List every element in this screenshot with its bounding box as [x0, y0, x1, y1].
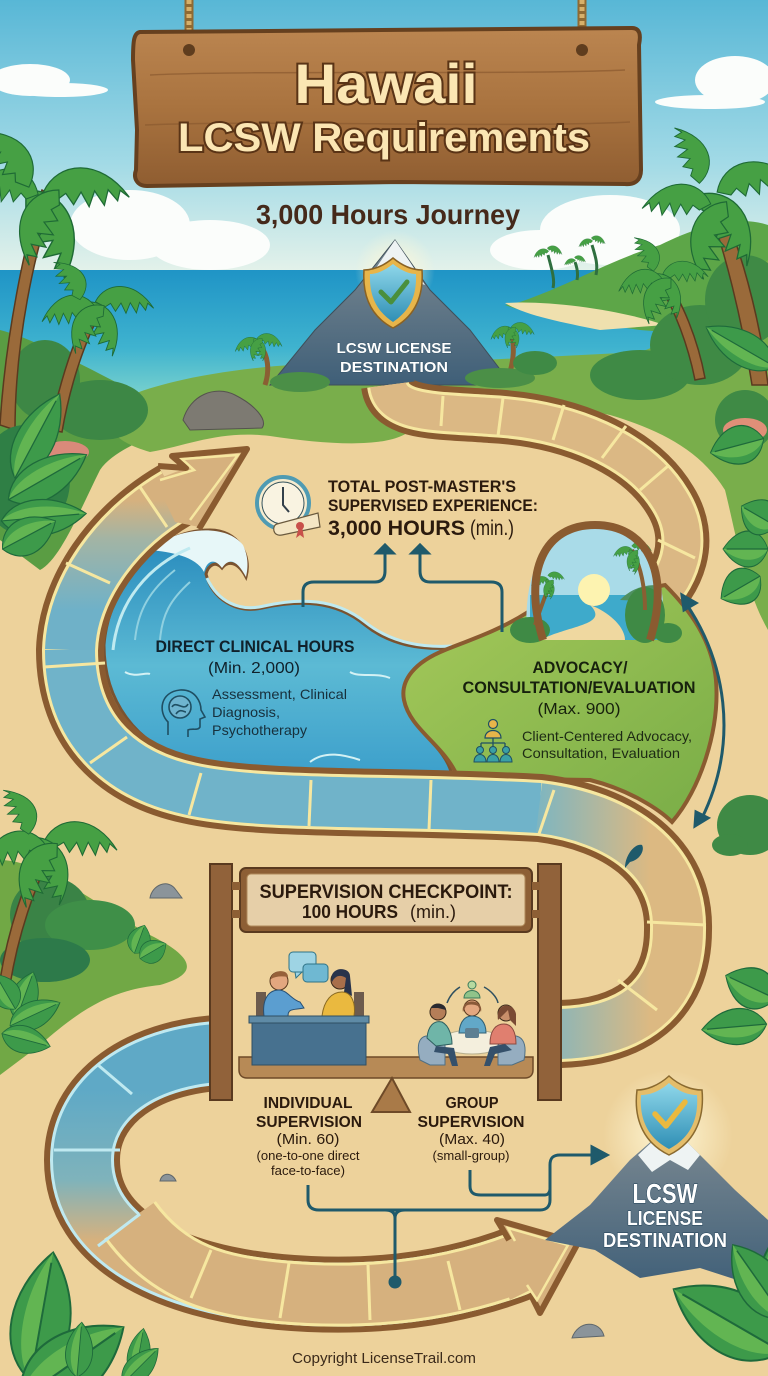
- plant: lower left island: [0, 968, 66, 1060]
- arrowhead: lower: [490, 1220, 578, 1313]
- connectors: supervision to destination: [308, 1147, 607, 1287]
- mountain label: lower: LCSW: [632, 1178, 698, 1209]
- sign title: SUPERVISION CHECKPOINT:: [260, 882, 512, 903]
- mountain label: top: DESTINATION: [340, 359, 448, 376]
- title: Hawaii: [294, 52, 478, 115]
- description: advocacy: Client-Centered Advocacy,: [522, 728, 692, 744]
- total experience text: 3,000 HOURS: [328, 517, 465, 540]
- description: direct clinical: Diagnosis,: [212, 704, 280, 720]
- clouds: [0, 56, 768, 270]
- sign: supervision checkpoint: [210, 864, 561, 1112]
- total experience icon: clock and diploma: [257, 477, 320, 538]
- mountain: top destination: [270, 230, 512, 385]
- label: group supervision: (small-group): [432, 1148, 510, 1163]
- distant green island: [505, 221, 768, 340]
- scale beam and fulcrum: [239, 1057, 533, 1112]
- panel: advocacy green: [403, 585, 717, 822]
- icon: shield top: [364, 258, 422, 328]
- label: individual supervision: (one-to-one direct: [256, 1148, 360, 1163]
- plant: right lower: [700, 957, 768, 1048]
- subtitle: 3,000 Hours Journey: [256, 199, 520, 230]
- chat bubbles: [289, 952, 328, 982]
- description: direct clinical: Psychotherapy: [212, 722, 307, 738]
- sand behind sign: [232, 860, 538, 1100]
- total experience text: TOTAL POST-MASTER'S: [328, 477, 516, 496]
- label: individual supervision: SUPERVISION: [256, 1114, 362, 1131]
- distant sand spit: [505, 302, 665, 330]
- label: group supervision: GROUP: [446, 1095, 499, 1112]
- label: group supervision: SUPERVISION: [418, 1114, 524, 1131]
- bush: right middle: [712, 795, 768, 856]
- label: advocacy: ADVOCACY/: [532, 658, 628, 677]
- left middle island: [0, 860, 187, 1075]
- sky: [0, 0, 768, 272]
- arch with beach scene: [510, 525, 682, 643]
- palm: lower left: [0, 782, 117, 1000]
- mountain label: lower: [603, 1178, 727, 1252]
- icon: brain head: [162, 690, 205, 737]
- wave foam: [150, 530, 248, 577]
- mountain label: lower: DESTINATION: [603, 1230, 727, 1252]
- arrows: to total: [303, 545, 502, 632]
- arrowhead: upper: [155, 449, 247, 529]
- total experience text: [328, 477, 538, 540]
- sea: [0, 270, 768, 400]
- copyright: Copyright LicenseTrail.com: [292, 1350, 476, 1367]
- label: advocacy: [462, 658, 696, 718]
- sign title: 100 HOURS: [302, 902, 398, 922]
- label: direct clinical hours: (Min. 2,000): [208, 660, 300, 677]
- small palms by mountain: [233, 321, 557, 392]
- mountain: lower destination: [545, 1070, 768, 1290]
- sign title: [260, 882, 512, 922]
- label: direct clinical hours: DIRECT CLINICAL HOURS: [156, 637, 354, 656]
- rocks: [150, 884, 604, 1338]
- sign board: [232, 868, 540, 932]
- right foreground plants: [698, 312, 768, 614]
- panel: direct clinical hours water: [104, 530, 452, 777]
- upper road segment: [388, 385, 695, 610]
- label: group supervision: [418, 1095, 524, 1163]
- bottom left plants: [2, 1247, 167, 1376]
- label: direct clinical hours: [156, 637, 354, 677]
- group supervision figures: [418, 981, 525, 1066]
- title: LCSW Requirements: [178, 116, 590, 160]
- map pin on road: [625, 845, 643, 868]
- distant palms: [532, 234, 607, 288]
- mountain label: top: [336, 340, 452, 376]
- label: group supervision: (Max. 40): [439, 1131, 505, 1148]
- description: advocacy: [522, 728, 692, 761]
- sign title: (min.): [410, 902, 456, 922]
- road: left loop and middle: [44, 487, 706, 1034]
- total experience text: (min.): [470, 517, 514, 540]
- label: individual supervision: INDIVIDUAL: [264, 1095, 353, 1112]
- description: direct clinical: [212, 686, 347, 738]
- label: individual supervision: (Min. 60): [276, 1131, 340, 1148]
- left jungle: [0, 330, 174, 570]
- icon: shield lower: [636, 1076, 702, 1155]
- palm: far left: [0, 114, 130, 430]
- posts: [210, 864, 561, 1100]
- icon: org chart: [474, 720, 512, 762]
- mountain label: top: LCSW LICENSE: [336, 340, 452, 357]
- title: [178, 52, 590, 160]
- left foreground plants: [0, 385, 96, 565]
- label: advocacy: (Max. 900): [538, 701, 620, 718]
- palm: right second: [617, 232, 708, 380]
- right bushes: [590, 255, 768, 450]
- palm: far right: [642, 121, 768, 385]
- total experience text: SUPERVISED EXPERIENCE:: [328, 496, 538, 515]
- rocks near mountain: [183, 391, 263, 430]
- ropes: [189, 0, 582, 50]
- wooden title sign: [133, 28, 641, 186]
- bottom right plants: [658, 1232, 768, 1376]
- mountain label: lower: LICENSE: [627, 1208, 703, 1230]
- label: individual supervision: [256, 1095, 362, 1178]
- label: individual supervision: face-to-face): [271, 1163, 345, 1178]
- description: advocacy: Consultation, Evaluation: [522, 745, 680, 761]
- arrow: double headed right: [682, 595, 724, 826]
- description: direct clinical: Assessment, Clinical: [212, 686, 347, 702]
- palm: second left: [40, 253, 154, 432]
- label: advocacy: CONSULTATION/EVALUATION: [462, 678, 696, 697]
- left bushes: [10, 340, 148, 440]
- desk individual supervision: [249, 952, 369, 1065]
- road: lower loop: [54, 1052, 522, 1320]
- central meadow: [110, 260, 768, 630]
